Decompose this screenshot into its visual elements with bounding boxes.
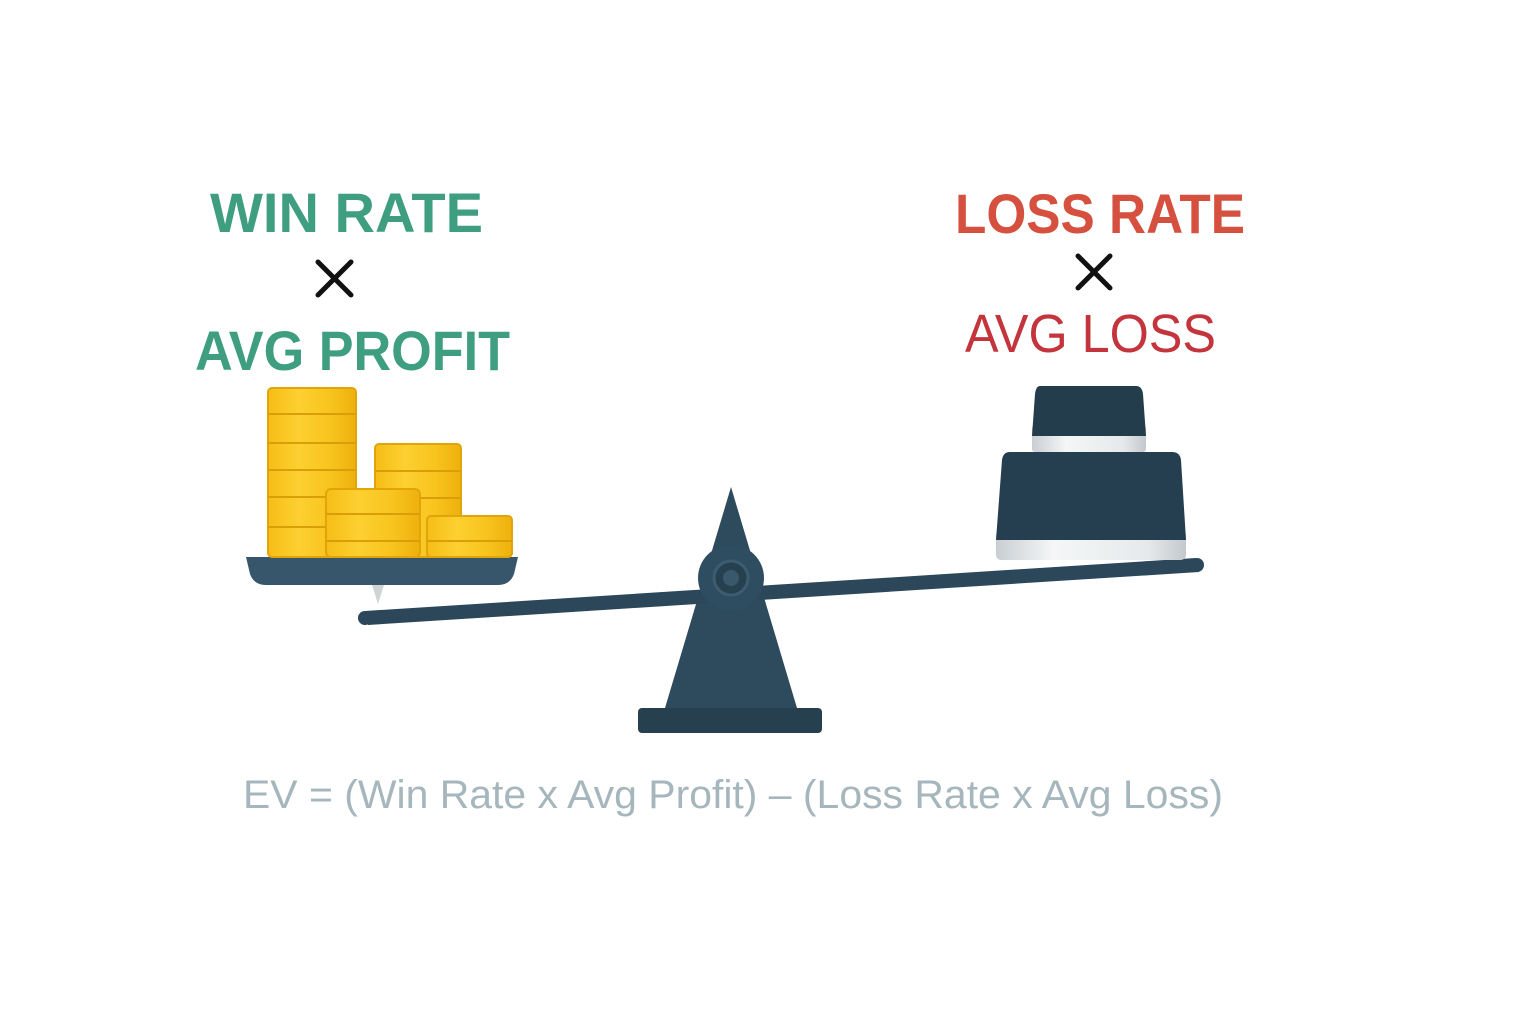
beam xyxy=(358,545,1204,625)
icon: multiply sign right xyxy=(1078,256,1110,288)
heading: win rate x avg profit: WIN RATE xyxy=(210,181,483,244)
pivot xyxy=(698,545,764,611)
formula: EV = (Win Rate x Avg Profit) – (Loss Rate x Avg Loss) xyxy=(243,773,1223,817)
heading: win rate x avg profit xyxy=(195,181,510,382)
right weights xyxy=(996,386,1186,560)
heading: win rate x avg profit: AVG PROFIT xyxy=(195,319,510,382)
heading: loss rate x avg loss xyxy=(955,182,1245,364)
fulcrum xyxy=(638,487,822,733)
left pan with coins xyxy=(246,388,518,604)
icon: multiply sign left xyxy=(318,262,351,295)
heading: loss rate x avg loss: LOSS RATE xyxy=(955,182,1245,245)
coin stacks xyxy=(268,388,512,557)
heading: loss rate x avg loss: AVG LOSS xyxy=(965,304,1216,364)
